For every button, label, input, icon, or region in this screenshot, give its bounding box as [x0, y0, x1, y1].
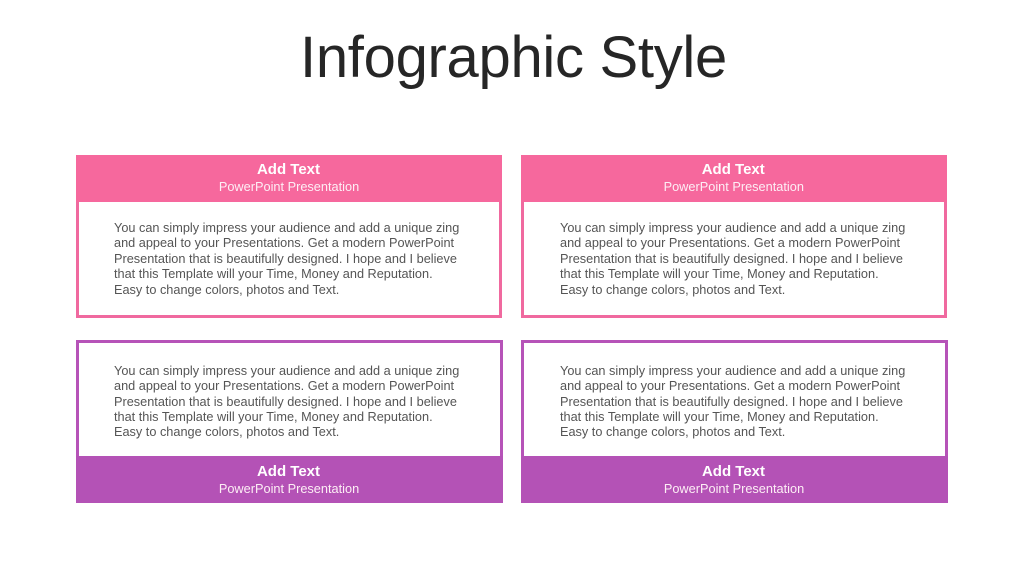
header: top left: PowerPoint Presentation [219, 179, 359, 194]
text block: bottom left: You can simply impress your audience and add a unique zing [114, 363, 459, 378]
footer: bottom right: Add Text [702, 463, 765, 480]
text block: top left: Presentation that is beautifully designed. I hope and I believe [114, 251, 457, 266]
text block: bottom left: and appeal to your Presentations. Get a modern PowerPoint [114, 378, 454, 393]
text block: top left: that this Template will your Time, Money and Reputation. [114, 266, 433, 281]
text block: top left: You can simply impress your audience and add a unique zing [114, 220, 459, 235]
text block: top left: and appeal to your Presentations. Get a modern PowerPoint [114, 235, 454, 250]
text block: bottom left [114, 363, 459, 439]
text block: bottom left: Presentation that is beautifully designed. I hope and I believe [114, 394, 457, 408]
text block: bottom left: that this Template will your Time, Money and Reputation. [114, 409, 433, 424]
text block: top right [560, 220, 905, 297]
footer: bottom right [521, 456, 948, 503]
text block: top left: Easy to change colors, photos and Text. [114, 282, 339, 297]
text block: top right: that this Template will your Time, Money and Reputation. [560, 266, 879, 281]
text block: top right: You can simply impress your audience and add a unique zing [560, 220, 905, 235]
footer: bottom left [76, 456, 503, 503]
footer: bottom right: PowerPoint Presentation [664, 481, 804, 496]
title: Infographic Style [300, 25, 727, 90]
panel: top left [76, 155, 502, 318]
header: top right [520, 155, 947, 202]
panel: bottom left [76, 340, 503, 503]
text block: top right: and appeal to your Presentations. Get a modern PowerPoint [560, 235, 900, 250]
text block: bottom right: and appeal to your Presentations. Get a modern PowerPoint [560, 378, 900, 393]
text block: bottom right [560, 363, 905, 439]
header: top left [76, 155, 502, 202]
panel: top right [520, 155, 947, 318]
header: top left: Add Text [257, 161, 320, 178]
text block: bottom left: Easy to change colors, photos and Text. [114, 424, 339, 439]
text block: top right: Easy to change colors, photos and Text. [560, 282, 785, 297]
panel: bottom right [521, 340, 948, 503]
text block: top right: Presentation that is beautifully designed. I hope and I believe [560, 251, 903, 266]
text block: bottom right: Presentation that is beautifully designed. I hope and I believe [560, 394, 903, 408]
footer: bottom left: Add Text [257, 463, 320, 480]
header: top right: PowerPoint Presentation [664, 179, 804, 194]
text block: bottom right: You can simply impress your audience and add a unique zing [560, 363, 905, 378]
text block: top left [114, 220, 459, 297]
header: top right: Add Text [702, 161, 765, 178]
footer: bottom left: PowerPoint Presentation [219, 481, 359, 496]
text block: bottom right: Easy to change colors, photos and Text. [560, 424, 785, 439]
text block: bottom right: that this Template will your Time, Money and Reputation. [560, 409, 879, 424]
